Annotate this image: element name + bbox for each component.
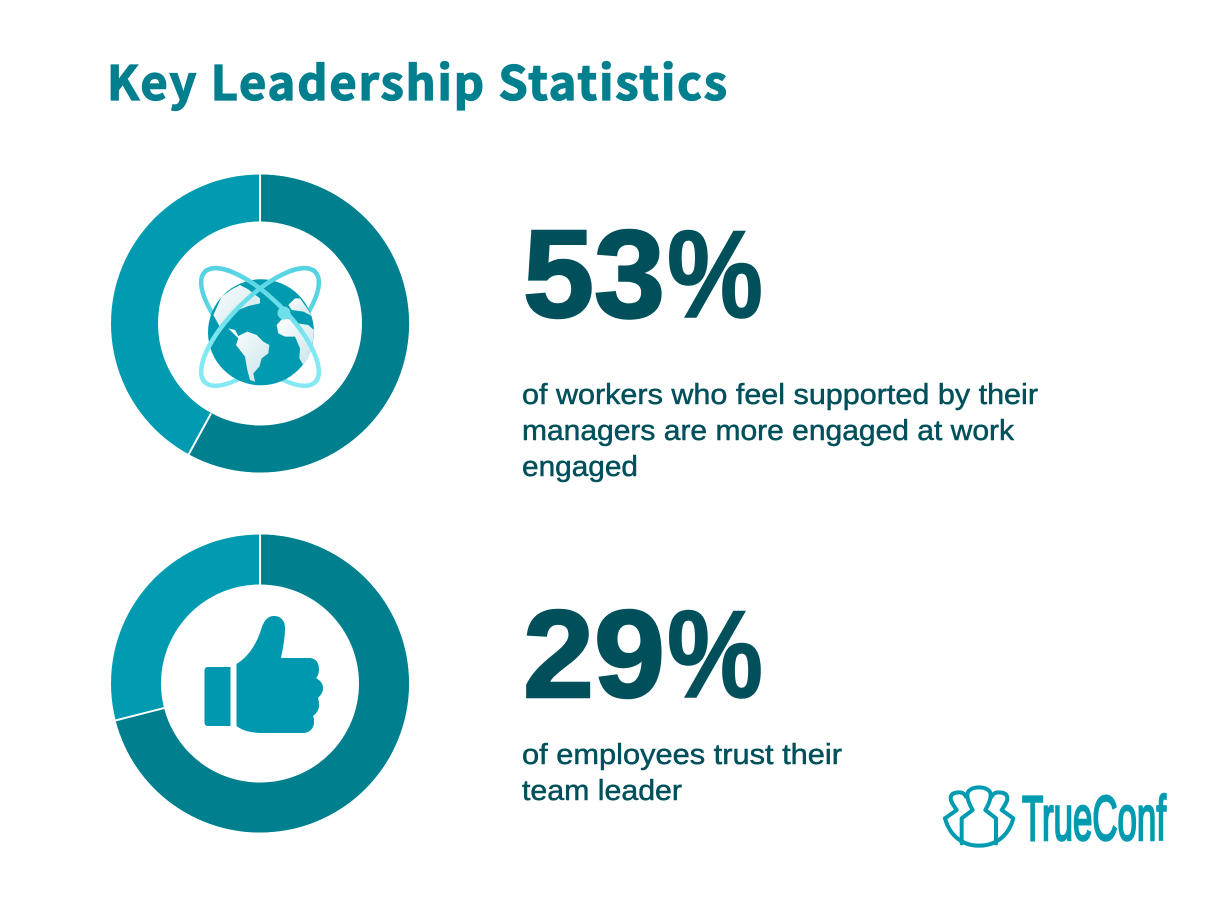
description: 53%: engaged	[522, 451, 638, 483]
description: 53%: of workers who feel supported by their	[522, 379, 1038, 411]
statistic: 29%	[523, 586, 763, 724]
description: 29%: of employees trust their	[522, 739, 842, 771]
donut chart: 53%	[111, 174, 409, 472]
icon: thumbs up	[204, 616, 323, 733]
logo: TrueConf	[945, 784, 1166, 854]
description: 29%: team leader	[522, 775, 682, 807]
description: 29%	[522, 739, 842, 807]
statistic: 29%: 29	[523, 586, 665, 724]
title: Key Leadership Statistics	[107, 45, 727, 114]
statistic: 53%: %	[667, 206, 763, 344]
icon: three people	[945, 787, 1013, 846]
icon: globe with orbits	[184, 251, 336, 403]
statistic: 29%: %	[667, 586, 763, 724]
statistic: 53%: 53	[523, 206, 665, 344]
description: 53%: managers are more engaged at work	[522, 415, 1015, 447]
statistic: 53%	[523, 206, 763, 344]
description: 53%	[522, 379, 1038, 483]
donut chart: 29%	[111, 534, 409, 832]
